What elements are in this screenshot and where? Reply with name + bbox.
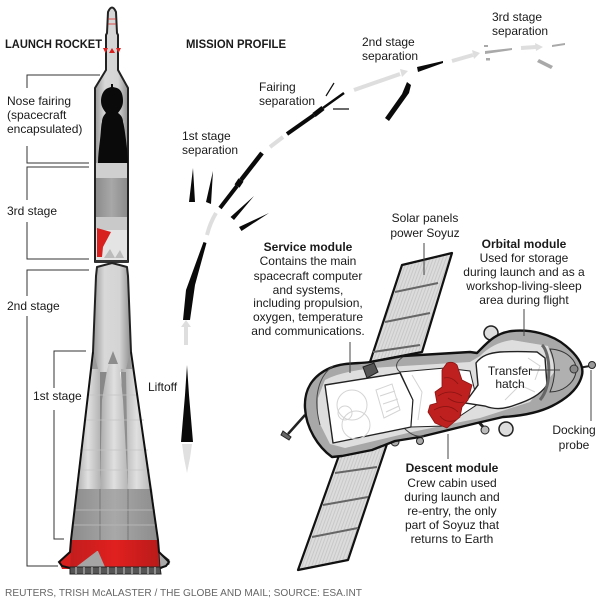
dropped boosters (189, 168, 269, 231)
upper solar panel (370, 253, 452, 362)
label: service module: oxygen, temperature (253, 310, 363, 324)
label: fairing separation: Fairing (259, 80, 296, 94)
label: first stage separation: separation (182, 143, 238, 157)
label: descent module: during launch and (404, 490, 500, 504)
collar (363, 363, 378, 378)
label: 1st stage: 1st stage (33, 389, 82, 403)
hull shading (318, 340, 556, 448)
interior line work (337, 358, 540, 439)
label: orbital module: area during flight (479, 293, 569, 307)
label: descent module: Descent module (406, 461, 499, 475)
trajectory dashes (186, 47, 536, 345)
label: liftoff: Liftoff (148, 380, 178, 394)
Soyuz spacecraft (281, 253, 596, 570)
booster outline (59, 352, 169, 568)
label: solar panels: power Soyuz (390, 226, 460, 240)
label: nose fairing: Nose fairing (7, 94, 71, 108)
label: nose fairing: (spacecraft (7, 108, 67, 122)
second stage separation (417, 61, 443, 72)
label: orbital module: Orbital module (482, 237, 567, 251)
escape tower and fairing (95, 8, 128, 262)
label: service module: and systems, (273, 283, 343, 297)
third stage bands (96, 163, 127, 178)
brackets (27, 75, 100, 566)
label: docking probe: probe (559, 438, 590, 452)
knobs (478, 421, 484, 428)
label: third stage separation: 3rd stage (492, 10, 542, 24)
label: 3rd stage: 3rd stage (7, 204, 57, 218)
label: service module: Contains the main (260, 254, 356, 268)
booster dark band (71, 489, 158, 540)
lower solar panel (298, 435, 390, 570)
ascending rocket (183, 242, 206, 320)
fairing halves (326, 83, 349, 109)
booster red band (69, 540, 161, 567)
label: service module: spacecraft computer (254, 269, 362, 283)
label: service module: including propulsion, (253, 296, 363, 310)
launch rocket illustration (59, 8, 169, 574)
label: transfer hatch: Transfer (488, 364, 532, 378)
label: docking probe: Docking (552, 423, 596, 437)
label: nose fairing: encapsulated) (7, 122, 82, 136)
first stage separated (220, 186, 237, 208)
label: orbital module: during launch and as a (463, 265, 585, 279)
descent module interior (400, 368, 478, 427)
label: fairing separation: separation (259, 94, 315, 108)
heading: launch rocket: LAUNCH ROCKET (5, 37, 103, 51)
docking probe (578, 366, 590, 368)
service module interior (325, 373, 413, 443)
second stage (93, 263, 131, 372)
mission trajectory (181, 43, 565, 473)
label: 2nd stage: 2nd stage (7, 299, 60, 313)
descent module crew red (428, 362, 472, 428)
boosters (76, 352, 100, 489)
label: descent module: Crew cabin used (407, 476, 497, 490)
label: orbital module: workshop-living-sleep (465, 279, 582, 293)
orbital module interior (465, 352, 547, 409)
second stage with fairing (287, 115, 314, 134)
small thrusters (391, 438, 399, 446)
label: service module: Service module (264, 240, 353, 254)
label: second stage separation: separation (362, 49, 418, 63)
label: descent module: re-entry, the only (407, 504, 497, 518)
third stage engine red (97, 228, 111, 257)
label: descent module: part of Soyuz that (405, 518, 500, 532)
liftoff rocket (181, 365, 193, 442)
label: solar panels: Solar panels (392, 211, 458, 225)
engine nozzles (70, 567, 161, 574)
label: transfer hatch: hatch (495, 377, 525, 391)
spacecraft silhouette (98, 84, 128, 163)
label: first stage separation: 1st stage (182, 129, 231, 143)
label: descent module: returns to Earth (411, 532, 493, 546)
label: second stage separation: 2nd stage (362, 35, 415, 49)
leader lines (350, 243, 591, 459)
hull (305, 331, 582, 457)
label: orbital module: Used for storage (480, 251, 569, 265)
bottom-left rod (288, 415, 305, 434)
source credit: REUTERS, TRISH McALASTER / THE GLOBE AND MAIL; SOURCE: ESA.INT (5, 587, 363, 599)
label: service module: and communications. (251, 324, 365, 338)
third stage separation (485, 43, 565, 69)
label: third stage separation: separation (492, 24, 548, 38)
heading: mission profile: MISSION PROFILE (186, 37, 286, 51)
orbital hatch (550, 349, 576, 392)
